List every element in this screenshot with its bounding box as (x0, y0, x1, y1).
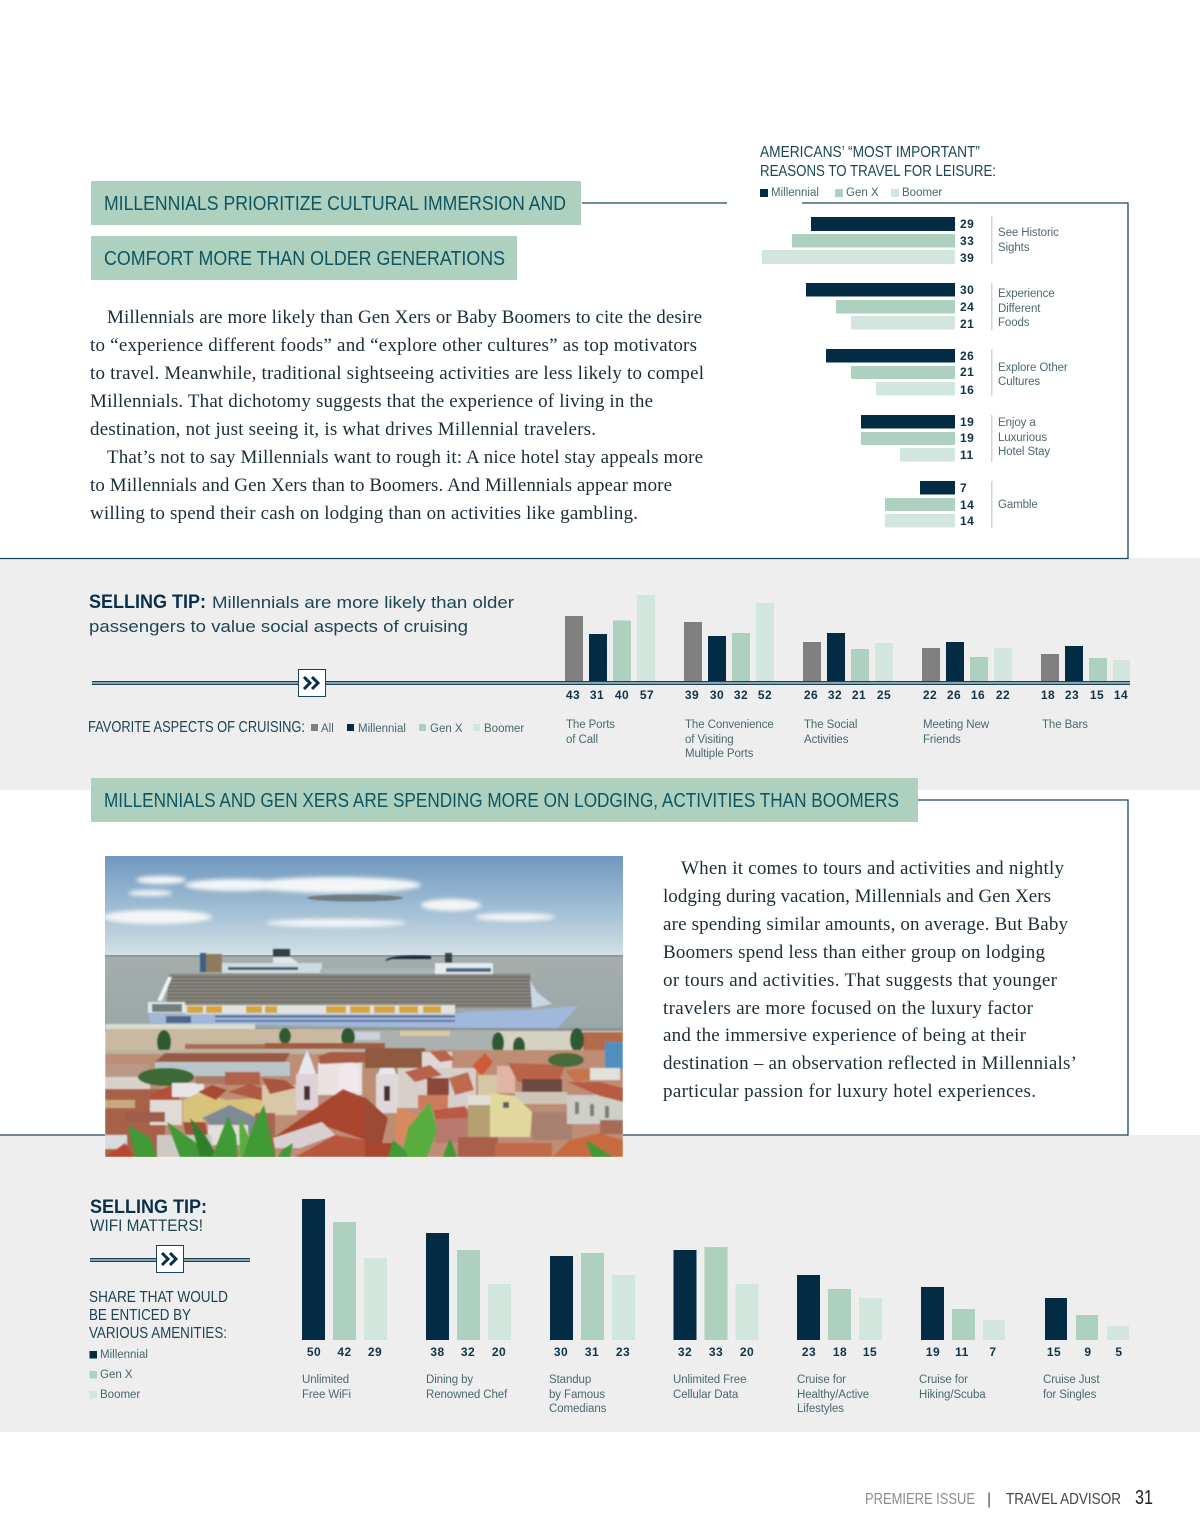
group: meeting new friends: 16 (971, 688, 985, 702)
footer: publication and page number (865, 1487, 1153, 1509)
group: dining by renowned chef: 20 (492, 1345, 506, 1359)
group: cruise for hiking scuba: 19 (926, 1345, 940, 1359)
group: gamble: 14 (960, 514, 974, 528)
legend: reasons to travel: Gen X (846, 187, 879, 199)
frame line: lodging section (0, 800, 1128, 1135)
group: experience different foods: 24 (960, 300, 974, 314)
group: explore other cultures: Cultures (998, 376, 1040, 388)
panel: first selling tip background (0, 558, 1200, 790)
group: standup by famous comedians (549, 1253, 635, 1415)
footer: publication and page number: 31 (1135, 1487, 1153, 1509)
ship upper works (273, 949, 290, 958)
heading: millennials prioritize: COMFORT MORE THAN OLDER GENERATIONS (104, 248, 505, 270)
bar chart: favorite aspects of cruising (565, 595, 1130, 760)
selling tip: wifi matters: SELLING TIP: (90, 1197, 207, 1218)
group: cruise for healthy active lifestyles: 15 (863, 1345, 877, 1359)
group: the convenience of visiting multiple ports: Multiple Ports (685, 748, 754, 760)
group: cruise for healthy active lifestyles: 23 (802, 1345, 816, 1359)
group: dining by renowned chef (426, 1233, 511, 1401)
group: the social activities: Activities (804, 734, 849, 746)
selling tip: social aspects (89, 592, 514, 636)
text block: spending patterns: particular passion for luxury hotel experiences. (663, 1081, 1036, 1102)
group: cruise for healthy active lifestyles: Cruise for (797, 1374, 846, 1386)
chart title: favorite aspects of cruising: FAVORITE ASPECTS OF CRUISING: (88, 719, 305, 736)
ship promenade and lifeboats (148, 1002, 185, 1013)
town right side (365, 1048, 425, 1068)
group: cruise for hiking scuba: 7 (989, 1345, 997, 1359)
group: meeting new friends: 22 (923, 688, 937, 702)
text block: spending patterns: are spending similar amounts, on average. But Baby (663, 914, 1068, 935)
chart title: amenities (89, 1289, 228, 1342)
heading: millennials prioritize: MILLENNIALS PRIORITIZE CULTURAL IMMERSION AND (104, 193, 566, 215)
group: standup by famous comedians: by Famous (549, 1389, 605, 1401)
group: the convenience of visiting multiple ports: 52 (758, 688, 772, 702)
group: the bars: 23 (1065, 688, 1079, 702)
legend: reasons to travel: Boomer (902, 187, 942, 199)
group: meeting new friends: Friends (923, 734, 961, 746)
group: experience different foods: 30 (960, 283, 974, 297)
group: the ports of call: 40 (615, 688, 629, 702)
bar chart: reasons to travel (762, 216, 1068, 528)
group: dining by renowned chef: Renowned Chef (426, 1389, 508, 1401)
text block: spending patterns: destination – an observation reflected in Millennials’ (663, 1053, 1077, 1074)
group: cruise for healthy active lifestyles: Lifestyles (797, 1403, 844, 1415)
legend: favorite aspects (311, 723, 524, 735)
ship hull (148, 1006, 578, 1029)
divider with arrow box: wifi (90, 1246, 250, 1272)
group: dining by renowned chef: Dining by (426, 1374, 473, 1386)
group: see historic sights: See Historic (998, 227, 1059, 239)
group: meeting new friends: 26 (947, 688, 961, 702)
text block: spending patterns: and the immersive experience of being at their (663, 1025, 1027, 1046)
group: the ports of call: 31 (590, 688, 604, 702)
group: unlimited free wifi: 42 (337, 1345, 352, 1359)
text block: millennial motivators: Millennials are more likely than Gen Xers or Baby Boomers to cite the desire (107, 307, 702, 328)
group: the social activities: The Social (804, 719, 857, 731)
group: experience different foods: Different (998, 303, 1041, 315)
group: unlimited free wifi: 29 (368, 1345, 382, 1359)
bar chart: amenities (302, 1199, 1129, 1415)
group: see historic sights: 29 (960, 217, 974, 231)
group: the social activities (803, 633, 893, 746)
group: the social activities: 25 (877, 688, 891, 702)
group: unlimited free wifi (302, 1199, 387, 1401)
text block: millennial motivators: destination, not just seeing it, is what drives Millennial travelers. (90, 419, 596, 440)
frame line: top section (0, 203, 1128, 558)
photo: cruise ship in lisbon (102, 856, 623, 1157)
text block: spending patterns: When it comes to tours and activities and nightly (681, 858, 1064, 879)
group: the bars: 18 (1041, 688, 1055, 702)
group: the convenience of visiting multiple ports: of Visiting (685, 734, 734, 746)
group: the convenience of visiting multiple ports: 32 (734, 688, 748, 702)
text block: spending patterns (663, 858, 1077, 1102)
group: experience different foods: Foods (998, 317, 1030, 329)
group: experience different foods (806, 283, 1055, 331)
legend: favorite aspects: All (321, 723, 334, 735)
group: enjoy a luxurious hotel stay: 19 (960, 431, 974, 445)
group: the convenience of visiting multiple ports: 39 (685, 688, 699, 702)
group: enjoy a luxurious hotel stay: Hotel Stay (998, 446, 1050, 458)
footer: publication and page number: | (987, 1491, 991, 1508)
chart title: amenities: SHARE THAT WOULD (89, 1289, 228, 1306)
group: unlimited free cellular data: 20 (740, 1345, 754, 1359)
text block: spending patterns: lodging during vacation, Millennials and Gen Xers (663, 886, 1051, 907)
group: see historic sights (762, 216, 1059, 265)
quay and ground (105, 1029, 345, 1053)
selling tip: social aspects: SELLING TIP: (89, 592, 206, 613)
text block: millennial motivators (90, 307, 704, 524)
group: the ports of call: 43 (566, 688, 580, 702)
group: dining by renowned chef: 32 (461, 1345, 475, 1359)
group: the ports of call: The Ports (566, 719, 615, 731)
group: the social activities: 32 (828, 688, 842, 702)
group: the social activities: 21 (852, 688, 866, 702)
legend: amenities (90, 1349, 148, 1401)
group: meeting new friends (922, 642, 1012, 746)
group: see historic sights: 33 (960, 234, 974, 248)
group: cruise for healthy active lifestyles: Healthy/Active (797, 1389, 869, 1401)
footer: publication and page number: PREMIERE ISSUE (865, 1491, 975, 1508)
group: cruise for hiking scuba: Hiking/Scuba (919, 1389, 986, 1401)
chart title: reasons to travel (760, 144, 996, 180)
group: cruise for healthy active lifestyles (797, 1275, 882, 1415)
selling tip: wifi matters: WIFI MATTERS! (90, 1216, 203, 1235)
group: cruise just for singles (1043, 1298, 1129, 1401)
text block: millennial motivators: to Millennials and Gen Xers than to Boomers. And Millennials appear more (90, 475, 672, 496)
legend: favorite aspects: Millennial (358, 723, 406, 735)
group: cruise just for singles: 15 (1047, 1345, 1061, 1359)
group: cruise for hiking scuba (919, 1287, 1005, 1401)
group: unlimited free wifi: 50 (307, 1345, 321, 1359)
group: cruise for healthy active lifestyles: 18 (833, 1345, 847, 1359)
chart title: amenities: VARIOUS AMENITIES: (89, 1325, 227, 1342)
group: enjoy a luxurious hotel stay: Luxurious (998, 432, 1047, 444)
group: explore other cultures (826, 349, 1068, 397)
heading: millennials prioritize (91, 181, 581, 280)
central church (318, 1063, 362, 1095)
group: standup by famous comedians: Comedians (549, 1403, 607, 1415)
chart title: reasons to travel: AMERICANS’ “MOST IMPORTANT” (760, 144, 980, 161)
text block: spending patterns: or tours and activities. That suggests that younger (663, 970, 1058, 991)
group: the convenience of visiting multiple ports (684, 603, 774, 760)
group: the bars (1041, 646, 1130, 731)
group: cruise just for singles: Cruise Just (1043, 1374, 1100, 1386)
group: the bars: 15 (1090, 688, 1104, 702)
group: explore other cultures: 21 (960, 365, 974, 379)
text block: millennial motivators: willing to spend their cash on lodging than on activities like gambling. (90, 503, 638, 524)
group: unlimited free wifi: Free WiFi (302, 1389, 351, 1401)
group: see historic sights: 39 (960, 251, 974, 265)
divider with arrow box: social aspects (92, 670, 1130, 696)
group: cruise for hiking scuba: Cruise for (919, 1374, 968, 1386)
group: the convenience of visiting multiple ports: 30 (710, 688, 724, 702)
chart title: reasons to travel: REASONS TO TRAVEL FOR LEISURE: (760, 163, 996, 180)
group: gamble: 14 (960, 498, 974, 512)
legend: reasons to travel (760, 187, 942, 199)
group: unlimited free cellular data: 33 (709, 1345, 723, 1359)
group: the social activities: 26 (804, 688, 818, 702)
group: cruise for hiking scuba: 11 (955, 1345, 969, 1359)
group: cruise just for singles: 9 (1084, 1345, 1092, 1359)
group: the bars: 14 (1114, 688, 1128, 702)
group: gamble: Gamble (998, 499, 1038, 511)
group: enjoy a luxurious hotel stay: 11 (960, 448, 974, 462)
town base (105, 1050, 623, 1157)
footer: publication and page number: TRAVEL ADVISOR (1006, 1491, 1121, 1508)
group: enjoy a luxurious hotel stay: 19 (960, 415, 974, 429)
text block: spending patterns: Boomers spend less than either group on lodging (663, 942, 1046, 963)
group: the ports of call (565, 595, 655, 746)
group: gamble: 7 (960, 481, 967, 495)
group: explore other cultures: Explore Other (998, 362, 1068, 374)
group: enjoy a luxurious hotel stay: Enjoy a (998, 417, 1036, 429)
group: unlimited free cellular data: Unlimited Free (673, 1374, 746, 1386)
selling tip: wifi matters (90, 1197, 207, 1235)
group: gamble (885, 481, 1038, 528)
legend: amenities: Millennial (100, 1349, 148, 1361)
panel: second selling tip background (0, 1135, 1200, 1432)
group: the ports of call: of Call (566, 734, 598, 746)
heading: spending on lodging (91, 778, 918, 822)
group: enjoy a luxurious hotel stay (861, 415, 1050, 462)
text block: millennial motivators: That’s not to say Millennials want to rough it: A nice hotel stay appeals more (107, 447, 703, 468)
selling tip: social aspects: Millennials are more likely than older (212, 593, 514, 612)
group: cruise just for singles: 5 (1115, 1345, 1123, 1359)
text block: millennial motivators: Millennials. That dichotomy suggests that the experience of living in the (90, 391, 653, 412)
legend: reasons to travel: Millennial (771, 187, 819, 199)
text block: spending patterns: travelers are more focused on the luxury factor (663, 998, 1034, 1019)
group: meeting new friends: Meeting New (923, 719, 990, 731)
group: meeting new friends: 22 (996, 688, 1010, 702)
heading: spending on lodging: MILLENNIALS AND GEN XERS ARE SPENDING MORE ON LODGING, ACTIVITIES THAN BOOMERS (104, 790, 899, 812)
group: unlimited free cellular data (673, 1247, 758, 1401)
legend: favorite aspects: Boomer (484, 723, 524, 735)
group: explore other cultures: 16 (960, 383, 974, 397)
legend: amenities: Gen X (100, 1369, 133, 1381)
group: the convenience of visiting multiple ports: The Convenience (685, 719, 774, 731)
legend: amenities: Boomer (100, 1389, 140, 1401)
group: the bars: The Bars (1042, 719, 1088, 731)
group: standup by famous comedians: 30 (554, 1345, 568, 1359)
group: unlimited free cellular data: Cellular Data (673, 1389, 739, 1401)
group: unlimited free cellular data: 32 (678, 1345, 692, 1359)
group: unlimited free wifi: Unlimited (302, 1374, 349, 1386)
group: standup by famous comedians: 23 (616, 1345, 630, 1359)
group: experience different foods: 21 (960, 317, 974, 331)
group: see historic sights: Sights (998, 242, 1030, 254)
foreground leaves (128, 1102, 613, 1157)
group: standup by famous comedians: 31 (585, 1345, 599, 1359)
group: cruise just for singles: for Singles (1043, 1389, 1097, 1401)
text block: millennial motivators: to travel. Meanwhile, traditional sightseeing activities are less likely to compel (90, 363, 704, 384)
group: the ports of call: 57 (640, 688, 654, 702)
legend: favorite aspects: Gen X (430, 723, 463, 735)
group: experience different foods: Experience (998, 288, 1055, 300)
text block: millennial motivators: to “experience different foods” and “explore other cultures” as top motivators (90, 335, 697, 356)
selling tip: social aspects: passengers to value social aspects of cruising (89, 617, 468, 636)
group: explore other cultures: 26 (960, 349, 974, 363)
group: dining by renowned chef: 38 (430, 1345, 445, 1359)
chart title: amenities: BE ENTICED BY (89, 1307, 191, 1324)
group: standup by famous comedians: Standup (549, 1374, 591, 1386)
